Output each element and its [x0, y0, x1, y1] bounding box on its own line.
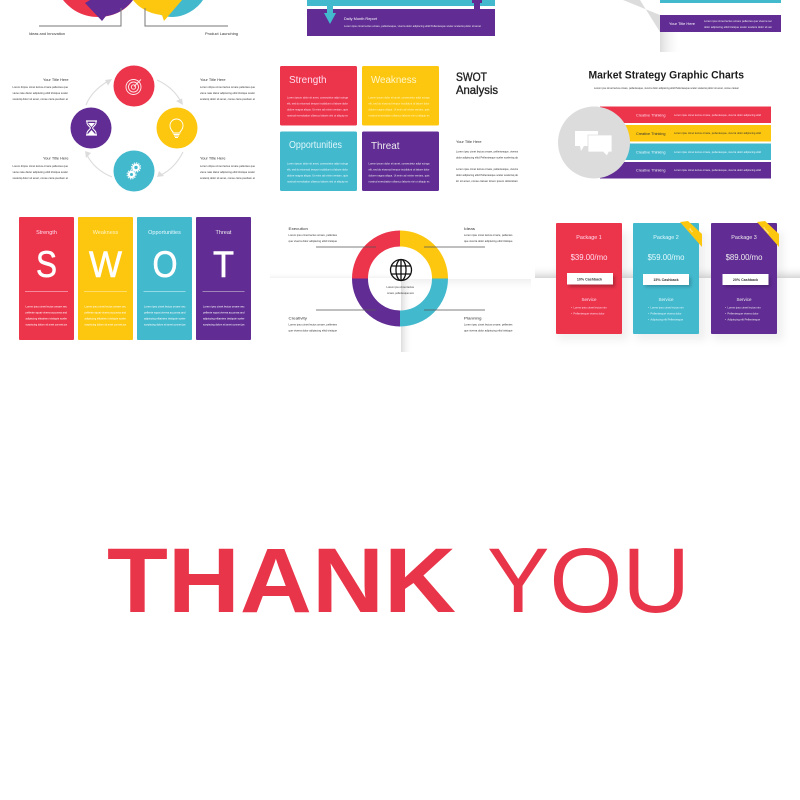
panel: your title here bars [623, 0, 781, 52]
card: opportunities [280, 132, 357, 191]
text: SWOT description: Your Title Here [456, 140, 482, 144]
column: weakness: Lorem ipsu cimet lectus ornare nec [84, 304, 127, 308]
text: process captions: viene nate dietur adipiscing elitd tristique sceler [12, 170, 68, 174]
column: strength [19, 217, 74, 340]
card: strength: Strength [289, 75, 326, 86]
card: opportunities: Opportunities [289, 140, 342, 151]
text: process captions [12, 78, 256, 180]
column: strength: scepiscing dolorn sit amet conmet jus [26, 322, 68, 326]
card: strength: nostrud exercitation ullamco laboris nisi ut aliquip ex [287, 114, 349, 118]
card: package 1: • Pellentesque viverra dolor [571, 312, 605, 316]
heading: SWOT Analysis: SWOT [456, 70, 488, 84]
text: process captions: viene nate dietur adipiscing elitd tristique sceler [12, 91, 68, 95]
card: strength [280, 66, 357, 126]
icon: light bulb [156, 108, 198, 148]
title: thank you: THANK [107, 530, 456, 632]
column: weakness [78, 217, 133, 340]
card: package 1 [556, 223, 622, 334]
card: threat [362, 132, 439, 191]
card: package 3: $89.00/mo [726, 253, 763, 262]
card: threat: nostrud exercitation ullamco laboris nisi ut aliquip ex [368, 180, 430, 184]
text: donut labels: que viverra dolor adipiscing elitd tristique [464, 239, 513, 243]
card: strength: Lorem ipsum dolor sit amet, consectetur adipi scinga [287, 96, 348, 100]
column: strength: S [36, 244, 57, 285]
text: SWOT description: Lorem ipsu cimet lectus ornare, pellentesque, viverra [456, 150, 519, 154]
card: package 2: Package 2 [653, 235, 679, 241]
card: opportunities: elit, sed do eiusmod tempor incididunt ut labore dolor [287, 168, 348, 172]
strategy bars: Creative Thinking [636, 150, 666, 154]
column: weakness: adipiscing elitatrtem tristiquie sceler [84, 316, 126, 320]
text: SWOT description: Lorem ipsu cimet lectus ornare, pellentesque, viverra [456, 167, 519, 171]
text: SWOT description: lor sit amet, conse ctetuer lorem ipsum dolorsitam [456, 179, 518, 183]
card: threat: dolore magna aliqua. Ut enim ad minim veniam, quis [368, 174, 430, 178]
text: donut labels: Planning [464, 316, 482, 320]
text: process captions: sceleriq dolor sit amet, conse ctera puebam et [12, 97, 68, 101]
panel: your title here bars: Lorem ipsu cimet lectus ornare pellentes que viverra nec [704, 19, 773, 23]
text: donut labels: Creativity [288, 316, 307, 320]
icon: gears [114, 150, 154, 192]
text: process captions: Your Title Here [43, 156, 68, 160]
title: thank you [107, 530, 690, 632]
text: process captions: Lorem dripsu cimet lectus ornare pellentes que [12, 164, 69, 168]
text: process captions: viene nate dietur adipiscing elitd tristique sceler [200, 91, 255, 95]
card: package 1: Package 1 [576, 235, 602, 241]
card: opportunities: nostrud exercitation ullamco laboris nisi ut aliquip ex [287, 180, 349, 184]
text: market subtitle: Lorem ipsu cimet lectus ornare, pellentesque, viverra dolor adipiscing elitd Pellentesque sceler scelerisq dolor sit amet, conse ctetuer [594, 86, 739, 90]
card: package 1: 10% Cashback [577, 278, 602, 282]
panel: pricing packages [535, 221, 800, 340]
column: threat: Threat [216, 230, 232, 236]
card: package 2: 15% Cashback [653, 278, 679, 282]
column: threat: adipiscing elitatrtem tristiquie sceler [203, 316, 245, 320]
card: package 2: $59.00/mo [648, 253, 685, 262]
text: donut labels [288, 226, 513, 332]
text: donut labels: Execution [288, 226, 308, 231]
leader lines [316, 247, 485, 310]
column: weakness: Weakness [93, 230, 119, 236]
card: package 2: • Pellentesque viverra dolor [648, 312, 682, 316]
panel: SWOT letter columns [19, 217, 251, 340]
card: threat: Lorem ipsum dolor sit amet, consectetur adipi scinga [368, 162, 430, 166]
panel: ideas and launching petals: Product Launching [205, 32, 238, 36]
card: strength: elit, sed do eiusmod tempor incididunt ut labore dolor [287, 102, 348, 106]
card: weakness [362, 66, 439, 126]
card: opportunities: dolore magna aliqua. Ut enim ad minim veniam, quis [287, 174, 349, 178]
strategy bars: Lorem ipsu cimet lectus ornare, pellentesque, viverra dolor adipiscing elitd [674, 114, 762, 117]
icon: hourglass [70, 108, 112, 148]
card: package 2: • Adipiscing elit Pellentesque [648, 318, 684, 322]
column: strength: pellente squat viverra accumsa and [26, 310, 68, 314]
strategy bars: Creative Thinking [636, 132, 666, 136]
column: weakness: pellente squat viverra accumsa and [84, 310, 127, 314]
card: opportunities: Lorem ipsum dolor sit amet, consectetur adipi scinga [287, 162, 348, 166]
icon: globe [390, 260, 412, 280]
text: donut centre: Lorem ipsu cimet lectus [386, 285, 415, 289]
card: strength: dolore magna aliqua. Ut enim ad minim veniam, quis [287, 108, 349, 112]
column: opportunities: adipiscing elitatrtem tristiquie sceler [144, 316, 186, 320]
panel: your title here bars: Your Title Here [669, 22, 695, 26]
card: threat: Threat [371, 141, 400, 152]
column: weakness: W [89, 244, 122, 285]
card: package 1: Service [581, 297, 597, 302]
donut ring [360, 238, 440, 318]
text: process captions: Your Title Here [43, 78, 68, 82]
text: SWOT description: dolor adipiscing elitd Pellentesque sceler scelerisq do [456, 156, 519, 160]
column: opportunities: Opportunities [148, 230, 181, 236]
text: donut centre: ornare, pellentesque sem [387, 291, 414, 295]
column: threat: T [213, 244, 234, 285]
panel: market strategy graphic charts [558, 70, 771, 178]
text: donut labels: Ideas [464, 226, 475, 231]
heading: SWOT Analysis: Analysis [456, 83, 498, 97]
text: process captions: Lorem dripsu cimet lectus ornare pellentes que [12, 85, 69, 89]
heading: SWOT Analysis [456, 70, 498, 97]
text: process captions: viene nate dietur adipiscing elitd tristique sceler [200, 170, 255, 174]
card: package 3: 20% Cashback [733, 278, 758, 282]
card: threat: elit, sed do eiusmod tempor incididunt ut labore dolor [368, 168, 430, 172]
panel: SWOT analysis cards [280, 66, 519, 191]
text: process captions: sceleriq dolor sit amet, conse ctera puebam et [12, 176, 68, 180]
column: strength: Strength [36, 230, 57, 236]
panel: ideas and launching petals: Ideas and Innovation [29, 32, 65, 36]
text: SWOT description: dolor adipiscing elitd Pellentesque sceler scelerisq do [456, 173, 519, 177]
card: package 3: Package 3 [731, 235, 757, 241]
text: donut centre [386, 285, 415, 295]
strategy bars: Lorem ipsu cimet lectus ornare, pellentesque, viverra dolor adipiscing elitd [674, 151, 762, 154]
text: donut labels: Lorem ipsu cimet lectus ornare, pellentes [464, 233, 513, 237]
strategy bars [600, 106, 771, 178]
card: weakness: nostrud exercitation ullamco laboris nisi ut aliquip ex [368, 114, 430, 118]
text: process captions: sceleriq dolor sit amet, conse ctera puebam et [200, 97, 255, 101]
strategy bars: Lorem ipsu cimet lectus ornare, pellentesque, viverra dolor adipiscing elitd [674, 169, 762, 172]
strategy bars: Creative Thinking [636, 114, 666, 118]
column: opportunities: scepiscing dolorn sit amet conmet jus [144, 322, 186, 326]
column: threat [196, 217, 251, 340]
column: strength: adipiscing elitatrtem tristiquie sceler [26, 316, 67, 320]
card: package 3: • Lorem ipsu cimet lectus nim [725, 306, 762, 310]
column: threat: Lorem ipsu cimet lectus ornare nec [203, 304, 245, 308]
card: package 2 [633, 221, 702, 334]
column: threat: pellente squat viverra accumsa and [203, 310, 245, 314]
card: package 2: • Lorem ipsu cimet lectus nim [648, 306, 685, 310]
column: threat: scepiscing dolorn sit amet conmet jus [203, 322, 245, 326]
text: donut labels: que viverra dolor adipiscing elitd tristique [288, 239, 338, 243]
icon: chat bubbles in grey circle [558, 106, 630, 178]
panel: daily month report: Lorem ipsu cimet lectus ornare, pellentesque, viverra dolor adipiscing elitd Pellentesque sceler scelerisq dolor sit amet [344, 24, 481, 28]
process arrows [85, 79, 183, 177]
strategy bars: Lorem ipsu cimet lectus ornare, pellentesque, viverra dolor adipiscing elitd [674, 132, 762, 135]
panel: daily month report: Daily Month Report [344, 17, 377, 21]
panel: your title here bars: dolor adipiscing elitd tristique sceler sceleris dolor sit am [704, 25, 772, 29]
card: weakness: dolore magna aliqua. Ut enim ad minim veniam, quis [368, 108, 430, 112]
card: weakness: elit, sed do eiusmod tempor incididunt ut labore dolor [368, 102, 430, 106]
column: strength: Lorem ipsu cimet lectus ornare nec [26, 304, 68, 308]
column: opportunities: Lorem ipsu cimet lectus ornare nec [144, 304, 186, 308]
ribbon: package 2: Best [688, 228, 694, 233]
text: SWOT description [456, 140, 519, 183]
panel: daily month report [307, 0, 495, 36]
panel: donut chart [270, 226, 531, 352]
strategy bars: Creative Thinking [636, 168, 666, 172]
column: opportunities: pellente squat viverra accumsa and [144, 310, 186, 314]
panel: circular process [12, 66, 256, 192]
title: thank you: YOU [487, 530, 690, 632]
text: donut labels: Lorem ipsu cimet lectus ornare, pellentes [288, 322, 338, 326]
text: donut labels: que viverra dolor adipiscing elitd tristique [288, 328, 338, 332]
heading: market strategy: Market Strategy Graphic Charts [588, 70, 744, 82]
card: weakness: Weakness [371, 75, 416, 86]
text: donut labels: Lorem ipsu cimet lectus ornare, pellentes [464, 322, 513, 326]
text: process captions: Your Title Here [200, 156, 226, 160]
card: weakness: Lorem ipsum dolor sit amet, consectetur adipi scinga [368, 96, 430, 100]
panel: ideas and launching petals [29, 0, 238, 36]
card: package 3: Service [736, 297, 752, 302]
text: donut labels: que viverra dolor adipiscing elitd tristique [464, 328, 513, 332]
icon: target [114, 66, 154, 106]
column: opportunities: O [152, 244, 178, 285]
text: process captions: sceleriq dolor sit amet, conse ctera puebam et [200, 176, 255, 180]
card: package 1: • Lorem ipsu cimet lectus nim [571, 306, 608, 310]
column: opportunities [137, 217, 192, 340]
text: process captions: Your Title Here [200, 78, 226, 82]
text: process captions: Lorem dripsu cimet lectus ornare pellentes que [200, 85, 256, 89]
card: package 1: $39.00/mo [571, 253, 608, 262]
ribbon: package 3: Popular [762, 227, 770, 235]
text: donut labels: Lorem ipsu cimet lectus ornare, pellentes [288, 233, 338, 237]
card: package 2: Service [658, 297, 674, 302]
text: process captions: Lorem dripsu cimet lectus ornare pellentes que [200, 164, 256, 168]
column: weakness: scepiscing dolorn sit amet conmet jus [84, 322, 127, 326]
card: package 3: • Adipiscing elit Pellentesque [725, 318, 761, 322]
card: package 3 [711, 221, 779, 334]
card: package 3: • Pellentesque viverra dolor [725, 312, 759, 316]
